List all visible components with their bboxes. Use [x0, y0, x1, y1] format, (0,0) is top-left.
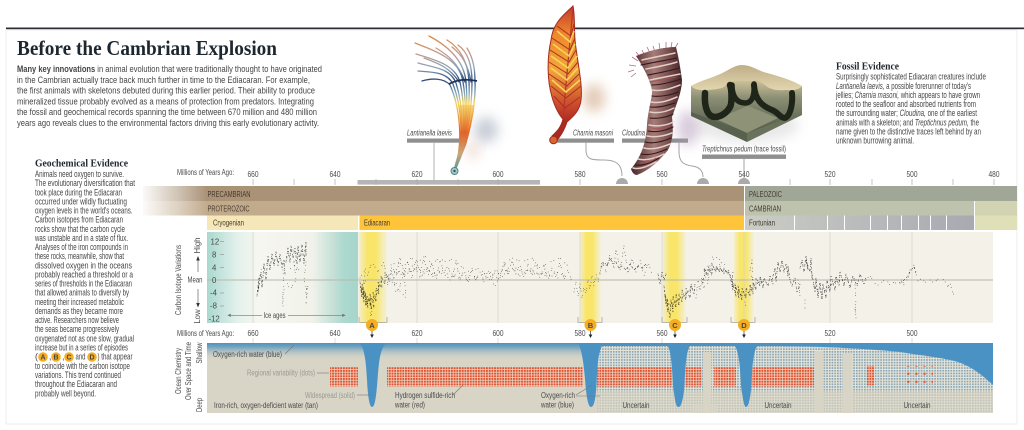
body text: geochemical evidence: probably well beyond. — [35, 388, 96, 398]
top axis: 520 — [824, 170, 836, 179]
y axis values: -12 — [208, 314, 220, 324]
label: Treptichnus pedum: Treptichnus pedum (trace fossil) — [702, 144, 786, 154]
panel: fossil evidence — [835, 62, 986, 146]
band: fortunian and stages: Fortunian — [749, 218, 775, 228]
label: Lantianella laevis — [407, 128, 463, 181]
chart background — [358, 232, 993, 323]
uncertain dots — [597, 345, 993, 413]
second axis: 640 — [330, 329, 341, 338]
body text: fossil evidence — [835, 72, 986, 146]
top axis: 580 — [574, 170, 586, 179]
body text: geochemical evidence: The evolutionary diversification that — [35, 178, 135, 188]
axis label: ocean chemistry: Deep — [195, 398, 204, 412]
sand top — [691, 65, 802, 90]
ocean labels: water (blue) — [540, 400, 574, 410]
body text: fossil evidence: the surrounding water; Cloudina, one of the earliest — [836, 108, 977, 118]
body text: geochemical evidence: and — [76, 352, 86, 362]
intro text: the first animals with skeletons debuted during this earlier period. Their ability to produce — [17, 86, 315, 96]
episode markers A B C D — [359, 317, 755, 338]
marker B: B — [588, 321, 594, 330]
body text: geochemical evidence: dissolved oxygen in the oceans — [35, 260, 132, 270]
intro text: years ago reveals clues to the environmental factors driving this early evolutionary activity. — [17, 118, 319, 128]
band: cambrian — [745, 201, 1017, 216]
ice age background — [207, 232, 358, 323]
burrows — [705, 84, 792, 118]
band: paleozoic: PALEOZOIC — [749, 190, 782, 199]
axis title: Millions of Years Ago: — [177, 168, 234, 177]
second axis: 520 — [824, 329, 836, 338]
ocean labels: Oxygen-rich water (blue) — [213, 350, 282, 359]
illustration: Lantianella laevis — [415, 36, 498, 174]
band: precambrian: PRECAMBRIAN — [208, 190, 251, 199]
body text: geochemical evidence: , — [49, 352, 51, 362]
rock faces — [691, 86, 747, 142]
top rule — [6, 28, 1024, 29]
body text: geochemical evidence: C — [66, 355, 72, 362]
ocean labels — [213, 345, 930, 410]
ocean labels: Regional variability (dots) — [247, 368, 315, 378]
top axis: 500 — [906, 170, 918, 179]
body text: geochemical evidence: occurred under wildly fluctuating — [35, 196, 127, 206]
axis label: carbon isotope variations: Mean — [188, 276, 202, 284]
body text: geochemical evidence: active. Researchers now believe — [35, 315, 119, 325]
body text: geochemical evidence: these rocks, meanwhile, show that — [35, 251, 124, 261]
intro text: in the Cambrian actually trace back much further in time to the Ediacaran. For example, — [17, 75, 310, 85]
highlight bands A B C D — [359, 232, 754, 323]
fossil labels and connectors — [407, 128, 786, 184]
body text: geochemical evidence: oxygen levels in the world's oceans. — [35, 206, 132, 216]
intro text: the fossil and geochemical records spanning the time between 670 million and 480 million — [17, 107, 317, 117]
body text: geochemical evidence: took place during the Ediacaran — [35, 187, 122, 197]
body text: geochemical evidence: meeting their increased metabolic — [35, 297, 124, 307]
carbon isotope chart — [174, 232, 993, 338]
top axis: 480 — [988, 170, 1000, 179]
top axis: 620 — [412, 170, 423, 179]
body text: geochemical evidence: the seas became progressively — [35, 324, 119, 334]
marker B — [584, 319, 596, 331]
y axis values: 8 — [212, 250, 216, 260]
band: cryogenian — [207, 216, 358, 230]
label: Charnia masoni: Charnia masoni — [573, 128, 613, 138]
band: cryogenian: Cryogenian — [213, 218, 244, 228]
axis label: ocean chemistry: Over Space and Time — [184, 342, 193, 400]
second axis: 660 — [248, 329, 259, 338]
top axis: 640 — [330, 170, 341, 179]
top axis: 560 — [656, 170, 668, 179]
ocean labels: Oxygen-rich — [541, 391, 575, 400]
body text: geochemical evidence: B — [53, 355, 59, 362]
blue oxygen-rich water — [358, 343, 386, 407]
band: ediacaran: Ediacaran — [364, 218, 390, 228]
body text: geochemical evidence: Analyses of the iron compounds in — [35, 242, 128, 252]
top axis: 660 — [248, 170, 259, 179]
y axis values — [208, 238, 224, 324]
body text: fossil evidence: jellies; Charnia masoni, which appears to have grown — [835, 90, 980, 100]
body text: geochemical evidence: ) that appear — [98, 352, 133, 362]
tan deep water — [207, 343, 993, 413]
second axis: 580 — [574, 329, 586, 338]
axis label: ocean chemistry — [174, 342, 204, 412]
scatter dots — [257, 242, 954, 318]
marker C: C — [672, 321, 678, 330]
second axis: Millions of Years Ago: — [177, 329, 234, 338]
axis label: carbon isotope variations: Low — [193, 309, 202, 324]
body text: geochemical evidence: oxygenated not as one slow, gradual — [35, 333, 134, 343]
y axis values: -4 — [210, 288, 218, 298]
band: paleozoic — [745, 186, 1017, 201]
heading: geochemical evidence: Geochemical Evidence — [35, 158, 129, 170]
second axis: 600 — [492, 329, 504, 338]
geologic time bands — [143, 186, 1017, 230]
body text: geochemical evidence — [34, 169, 135, 398]
body text: geochemical evidence: Animals need oxygen to survive. — [35, 169, 124, 179]
label: ice ages — [228, 311, 345, 320]
body text: geochemical evidence: series of thresholds in the Ediacaran — [35, 279, 132, 289]
body text: geochemical evidence: , — [62, 352, 64, 362]
label: Charnia masoni — [556, 128, 628, 184]
band: ediacaran — [360, 216, 744, 230]
label: Lantianella laevis: Lantianella laevis — [407, 128, 452, 138]
body text: geochemical evidence: was unstable and in a state of flux. — [34, 233, 128, 243]
ocean labels: water (red) — [394, 400, 425, 410]
body text: geochemical evidence: D — [89, 355, 95, 362]
top axis: 600 — [492, 170, 504, 179]
axis label: carbon isotope variations: High — [193, 237, 202, 254]
ocean labels: Uncertain — [622, 401, 650, 410]
band: cambrian: CAMBRIAN — [749, 204, 781, 214]
marker C — [669, 319, 681, 331]
ocean labels: Widespread (solid) — [305, 391, 355, 400]
body text: geochemical evidence: increase but in a series of episodes — [35, 342, 128, 352]
title: Before the Cambrian Explosion — [17, 36, 277, 60]
second axis: 500 — [906, 329, 918, 338]
top axis — [177, 168, 1000, 185]
body text: geochemical evidence: to coincide with the carbon isotope — [35, 361, 130, 371]
axis label: ocean chemistry: Ocean Chemistry — [174, 348, 183, 394]
label: Treptichnus pedum — [702, 144, 786, 184]
intro text: mineralized tissue probably evolved as a means of protection from predators. Integrating — [17, 96, 314, 106]
second axis: 560 — [656, 329, 668, 338]
label: Cloudina — [622, 128, 709, 184]
band: fade edge — [143, 186, 207, 216]
body text: geochemical evidence: probably reached a threshold or a — [35, 269, 133, 279]
floor — [716, 106, 778, 133]
body text: fossil evidence: Lantianella laevis, a possible forerunner of today's — [836, 81, 971, 91]
body text: geochemical evidence: Carbon isotopes from Ediacaran — [35, 215, 123, 225]
y axis values: 0 — [212, 276, 217, 285]
illustration: Treptichnus pedum block — [691, 65, 802, 143]
body text: geochemical evidence: that allowed animals to diversify by — [35, 288, 129, 298]
intro text: Many key innovations in animal evolution that were traditionally thought to have originated — [17, 64, 322, 74]
label: ice ages: Ice ages — [264, 311, 286, 320]
second axis — [177, 329, 918, 343]
marker A: A — [369, 321, 375, 330]
body text: geochemical evidence: variations. This trend continued — [35, 370, 121, 380]
band: proterozoic: PROTEROZOIC — [208, 204, 250, 214]
y axis values: -8 — [210, 302, 217, 310]
body text: fossil evidence: unknown burrowing animal. — [836, 136, 914, 146]
intro text — [17, 64, 322, 128]
marker D: D — [741, 321, 747, 330]
illustration: Cloudina — [628, 42, 699, 175]
ocean labels: Uncertain — [904, 401, 930, 410]
body text: geochemical evidence: throughout the Ediacaran and — [35, 379, 117, 389]
second axis: 620 — [412, 329, 423, 338]
marker D — [738, 319, 750, 331]
illustration: Charnia masoni — [548, 6, 605, 144]
red hydrogen sulfide dots — [330, 366, 933, 387]
band: precambrian — [143, 186, 744, 201]
band: fortunian and stages — [745, 216, 1017, 230]
ocean labels: Uncertain — [764, 401, 792, 410]
marker A — [366, 319, 378, 331]
panel: geochemical evidence — [34, 158, 135, 398]
shallow gradient — [207, 343, 607, 360]
axis label: ocean chemistry: Shallow — [195, 342, 204, 364]
y axis values: 12 — [210, 238, 219, 246]
label: Cloudina: Cloudina — [622, 128, 645, 138]
ocean chemistry chart — [174, 342, 993, 413]
y axis values: 4 — [212, 264, 217, 272]
body text: geochemical evidence: rocks show that the carbon cycle — [35, 224, 125, 234]
ocean labels: Hydrogen sulfide-rich — [395, 391, 455, 400]
ocean labels: Iron-rich, oxygen-deficient water (tan) — [214, 401, 318, 410]
body text: fossil evidence: animals with a skeleton; and Treptichnus pedum, the — [836, 117, 979, 127]
heading: fossil evidence: Fossil Evidence — [836, 62, 900, 72]
band: proterozoic — [143, 201, 744, 216]
body text: geochemical evidence: A — [40, 355, 46, 362]
top axis: 540 — [738, 170, 750, 179]
axis label: carbon isotope variations — [174, 237, 202, 324]
body text: geochemical evidence: demands as they became more — [35, 306, 123, 316]
axis label: carbon isotope variations: Carbon Isotope Variations — [174, 245, 183, 315]
body text: geochemical evidence: ( — [35, 352, 38, 362]
